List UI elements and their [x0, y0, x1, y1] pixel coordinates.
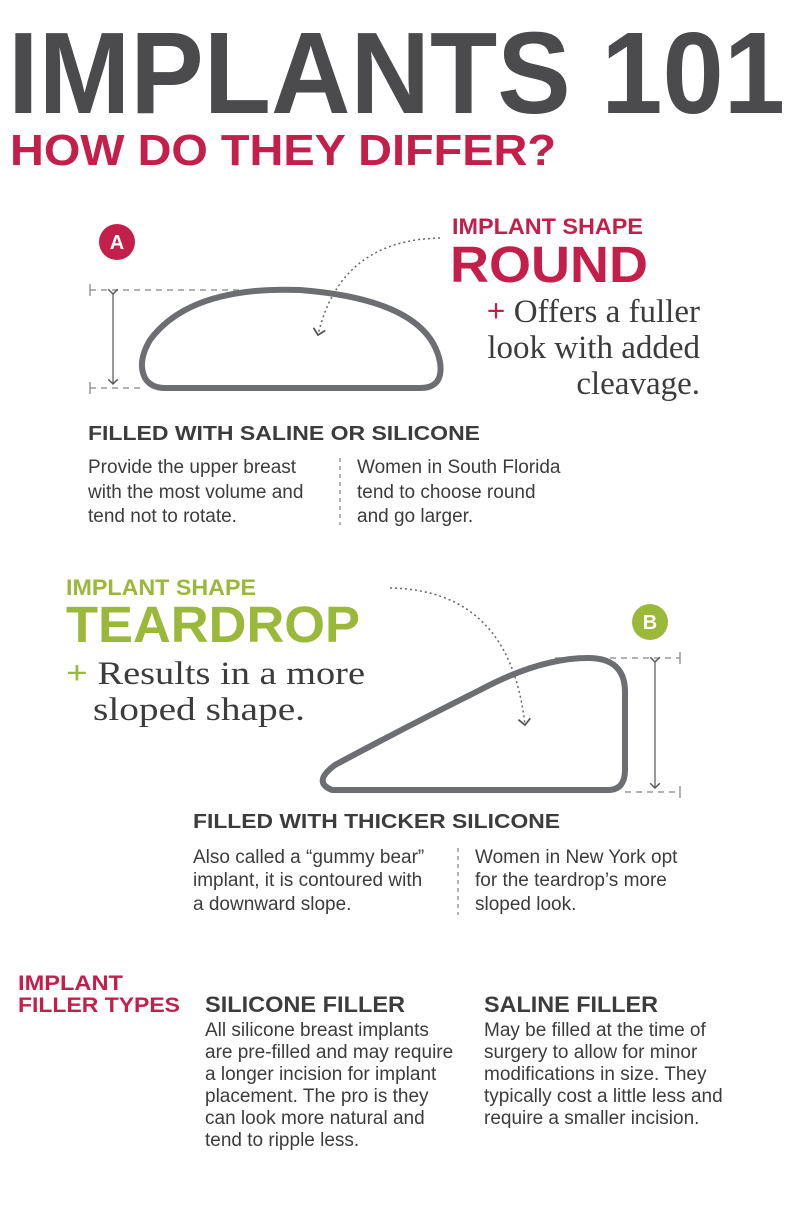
badge B	[632, 604, 668, 640]
column: silicone filler	[205, 992, 453, 1151]
column: silicone filler: are pre-filled and may require	[205, 1042, 453, 1063]
text: teardrop details	[193, 847, 678, 915]
text: round details: Women in South Florida	[357, 457, 561, 478]
text: teardrop details: Also called a “gummy bear”	[193, 847, 424, 868]
heading: implant shape teardrop: IMPLANT SHAPE	[66, 575, 256, 600]
text: round details	[87, 457, 561, 527]
heading: implant shape round: ROUND	[450, 236, 648, 293]
text: round benefit	[487, 294, 700, 402]
text: teardrop benefit	[66, 656, 365, 728]
text: teardrop details: for the teardrop’s more	[475, 870, 667, 891]
text: round details: Provide the upper breast	[88, 457, 297, 478]
text: teardrop benefit: + Results in a more	[66, 656, 365, 692]
text: round details: tend not to rotate.	[88, 506, 237, 527]
column: silicone filler: All silicone breast implants	[205, 1020, 429, 1041]
column: saline filler	[484, 992, 723, 1129]
text: round benefit: cleavage.	[576, 366, 700, 402]
column: silicone filler: tend to ripple less.	[205, 1130, 359, 1151]
heading: filled with saline or silicone: FILLED WITH SALINE OR SILICONE	[88, 423, 480, 445]
heading: implant filler types	[18, 972, 180, 1017]
badge A	[99, 224, 135, 260]
text: teardrop details: sloped look.	[475, 894, 576, 915]
badge A: A	[110, 232, 124, 254]
heading: implant filler types: IMPLANT	[18, 972, 123, 995]
column: saline filler: surgery to allow for minor	[484, 1042, 698, 1063]
teardrop shape diagram	[323, 652, 680, 798]
text: teardrop details: a downward slope.	[193, 894, 351, 915]
panel: filler types	[18, 972, 723, 1151]
text: teardrop benefit: sloped shape.	[93, 692, 305, 728]
text: teardrop details: implant, it is contoured with	[193, 870, 422, 891]
badge B: B	[643, 612, 657, 634]
column: saline filler: May be filled at the time of	[484, 1020, 706, 1041]
column: saline filler: modifications in size. They	[484, 1064, 707, 1085]
text: round details: and go larger.	[357, 506, 473, 527]
heading: filled with thicker silicone: FILLED WITH THICKER SILICONE	[193, 811, 560, 833]
panel: round	[87, 214, 700, 527]
column: saline filler: typically cost a little less and	[484, 1086, 723, 1107]
column: silicone filler: placement. The pro is they	[205, 1086, 429, 1107]
arrow: dotted to teardrop	[390, 588, 525, 725]
text: teardrop details: Women in New York opt	[475, 847, 678, 868]
subtitle: HOW DO THEY DIFFER?	[10, 126, 556, 175]
text: round benefit: look with added	[487, 330, 700, 366]
arrow: dotted to round	[318, 238, 440, 335]
column: saline filler: require a smaller incision.	[484, 1108, 699, 1129]
text: round details: with the most volume and	[87, 482, 303, 503]
column: saline filler: SALINE FILLER	[484, 992, 658, 1017]
column: silicone filler: SILICONE FILLER	[205, 992, 405, 1017]
heading: implant shape round	[450, 214, 648, 293]
heading: implant shape round: IMPLANT SHAPE	[452, 214, 643, 239]
round shape diagram	[90, 284, 441, 394]
column: silicone filler: a longer incision for implant	[205, 1064, 437, 1085]
column: silicone filler: can look more natural and	[205, 1108, 425, 1129]
heading: implant filler types: FILLER TYPES	[18, 994, 180, 1017]
text: round details: tend to choose round	[357, 482, 536, 503]
text: round benefit: + Offers a fuller	[487, 294, 700, 330]
panel: teardrop	[66, 575, 680, 915]
heading: implant shape teardrop: TEARDROP	[66, 596, 360, 653]
